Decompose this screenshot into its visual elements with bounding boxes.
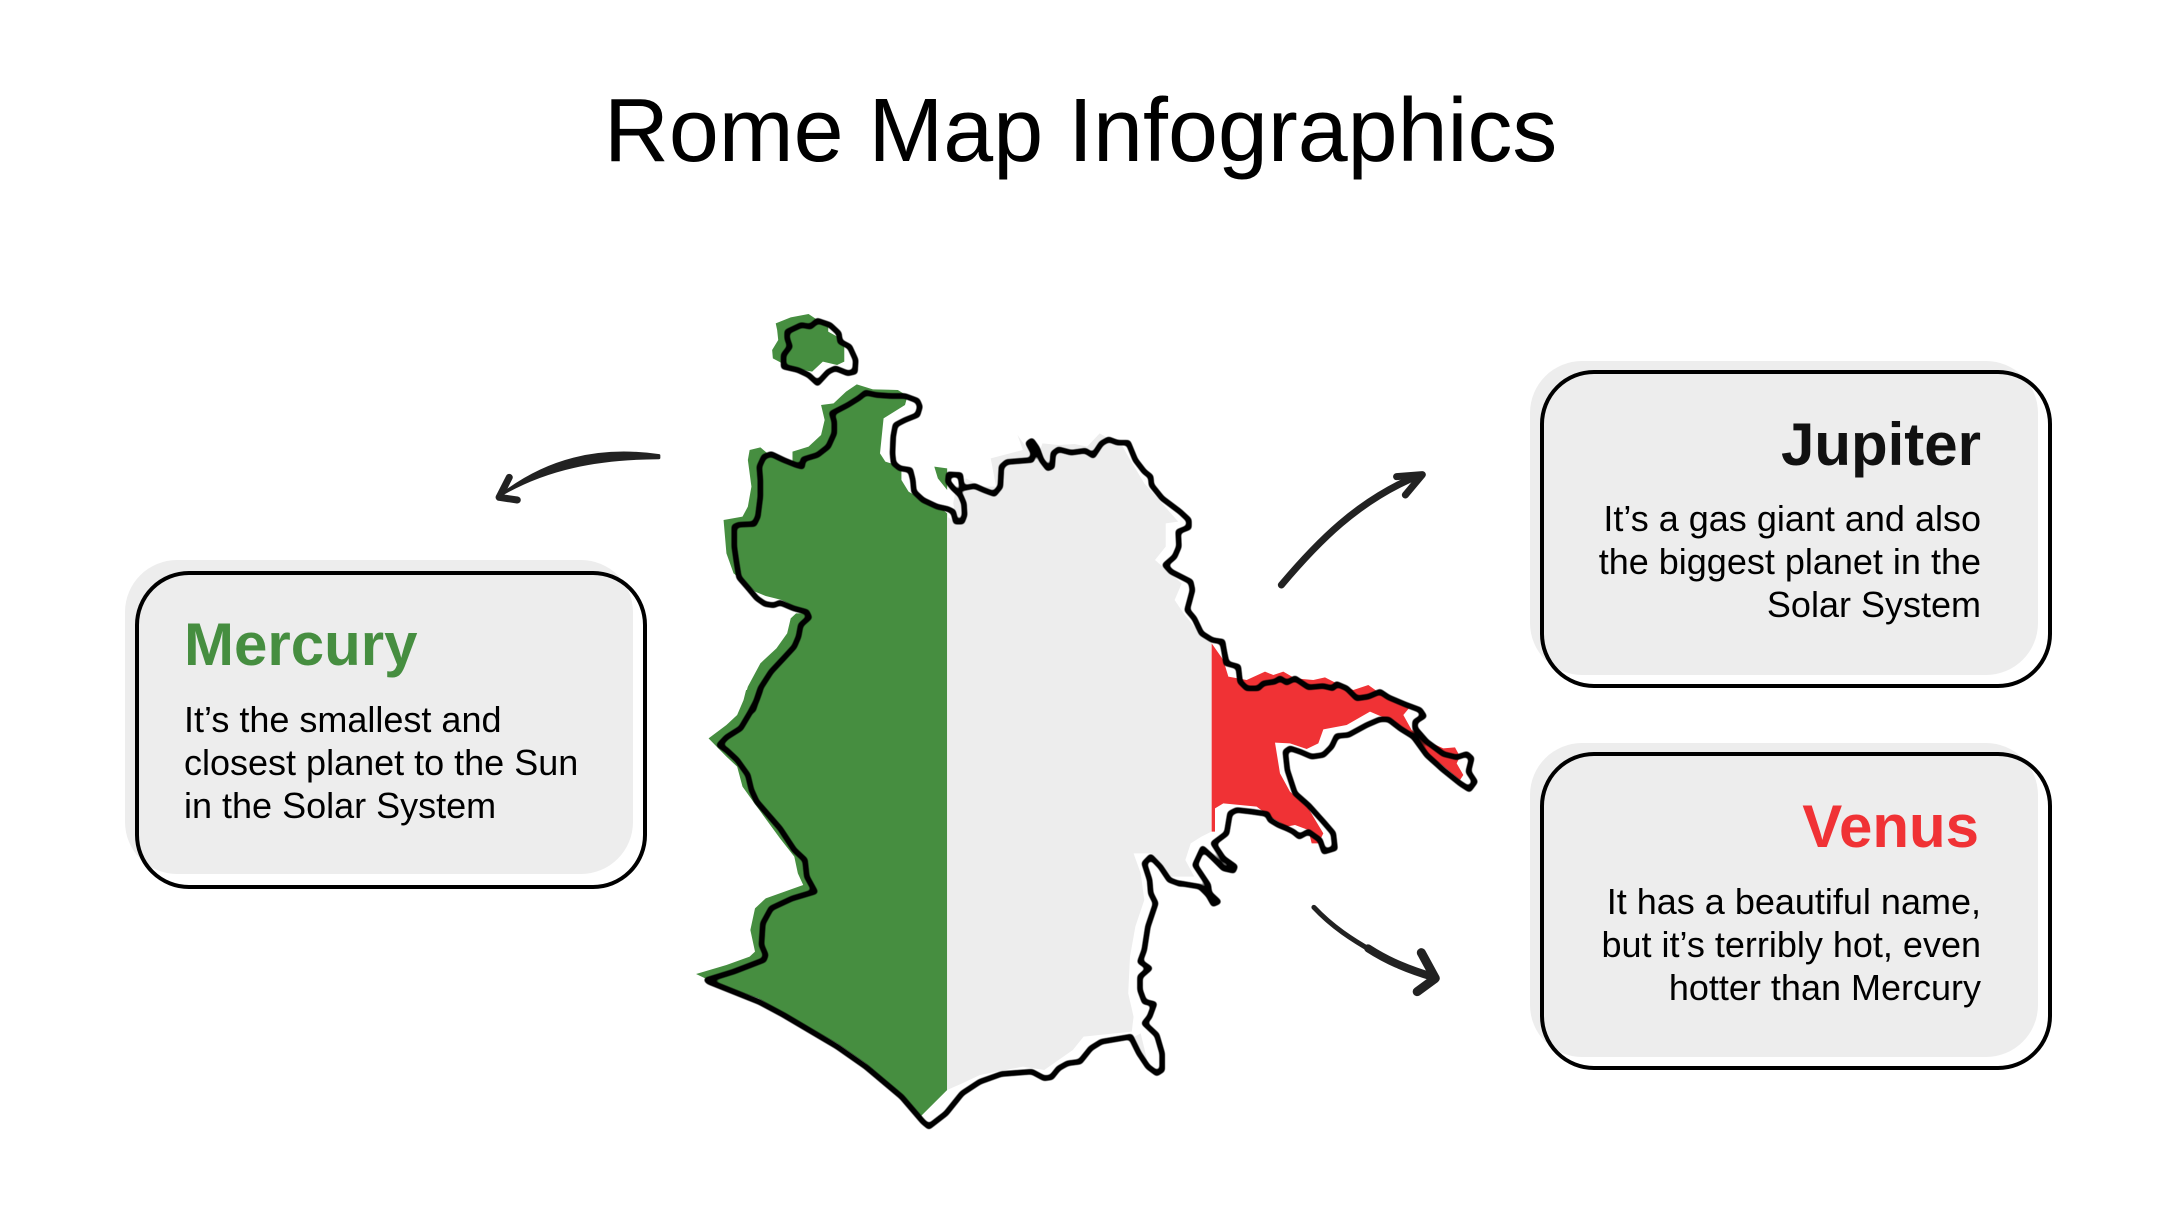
body text: Mercury: in the Solar System — [184, 785, 496, 826]
body text: Venus: It has a beautiful name, — [1607, 881, 1981, 922]
map region: green — [696, 314, 947, 1116]
arrow: to Mercury — [499, 453, 659, 500]
body text: Venus: but it’s terribly hot, even — [1601, 924, 1981, 965]
map region: red — [1212, 643, 1463, 843]
heading: Mercury: Mercury — [184, 611, 418, 678]
panel: Mercury — [125, 560, 645, 887]
map region: white-grey — [947, 433, 1211, 1090]
map outline — [707, 321, 1475, 1127]
map of Rome — [696, 314, 1475, 1127]
body text: Venus: hotter than Mercury — [1669, 967, 1981, 1008]
panel: Jupiter — [1530, 361, 2050, 686]
body text: Jupiter: Solar System — [1767, 584, 1981, 625]
body text: Jupiter: the biggest planet in the — [1599, 541, 1981, 582]
body text: Jupiter: It’s a gas giant and also — [1603, 498, 1981, 539]
title: Rome Map Infographics — [604, 81, 1557, 181]
heading: Jupiter: Jupiter — [1781, 411, 1981, 478]
arrow: to Jupiter — [1281, 475, 1422, 585]
body text: Mercury: closest planet to the Sun — [184, 742, 578, 783]
arrow: to Venus — [1314, 907, 1435, 992]
panel: Venus — [1530, 743, 2050, 1068]
body text: Mercury: It’s the smallest and — [184, 699, 502, 740]
heading: Venus: Venus — [1802, 793, 1979, 860]
